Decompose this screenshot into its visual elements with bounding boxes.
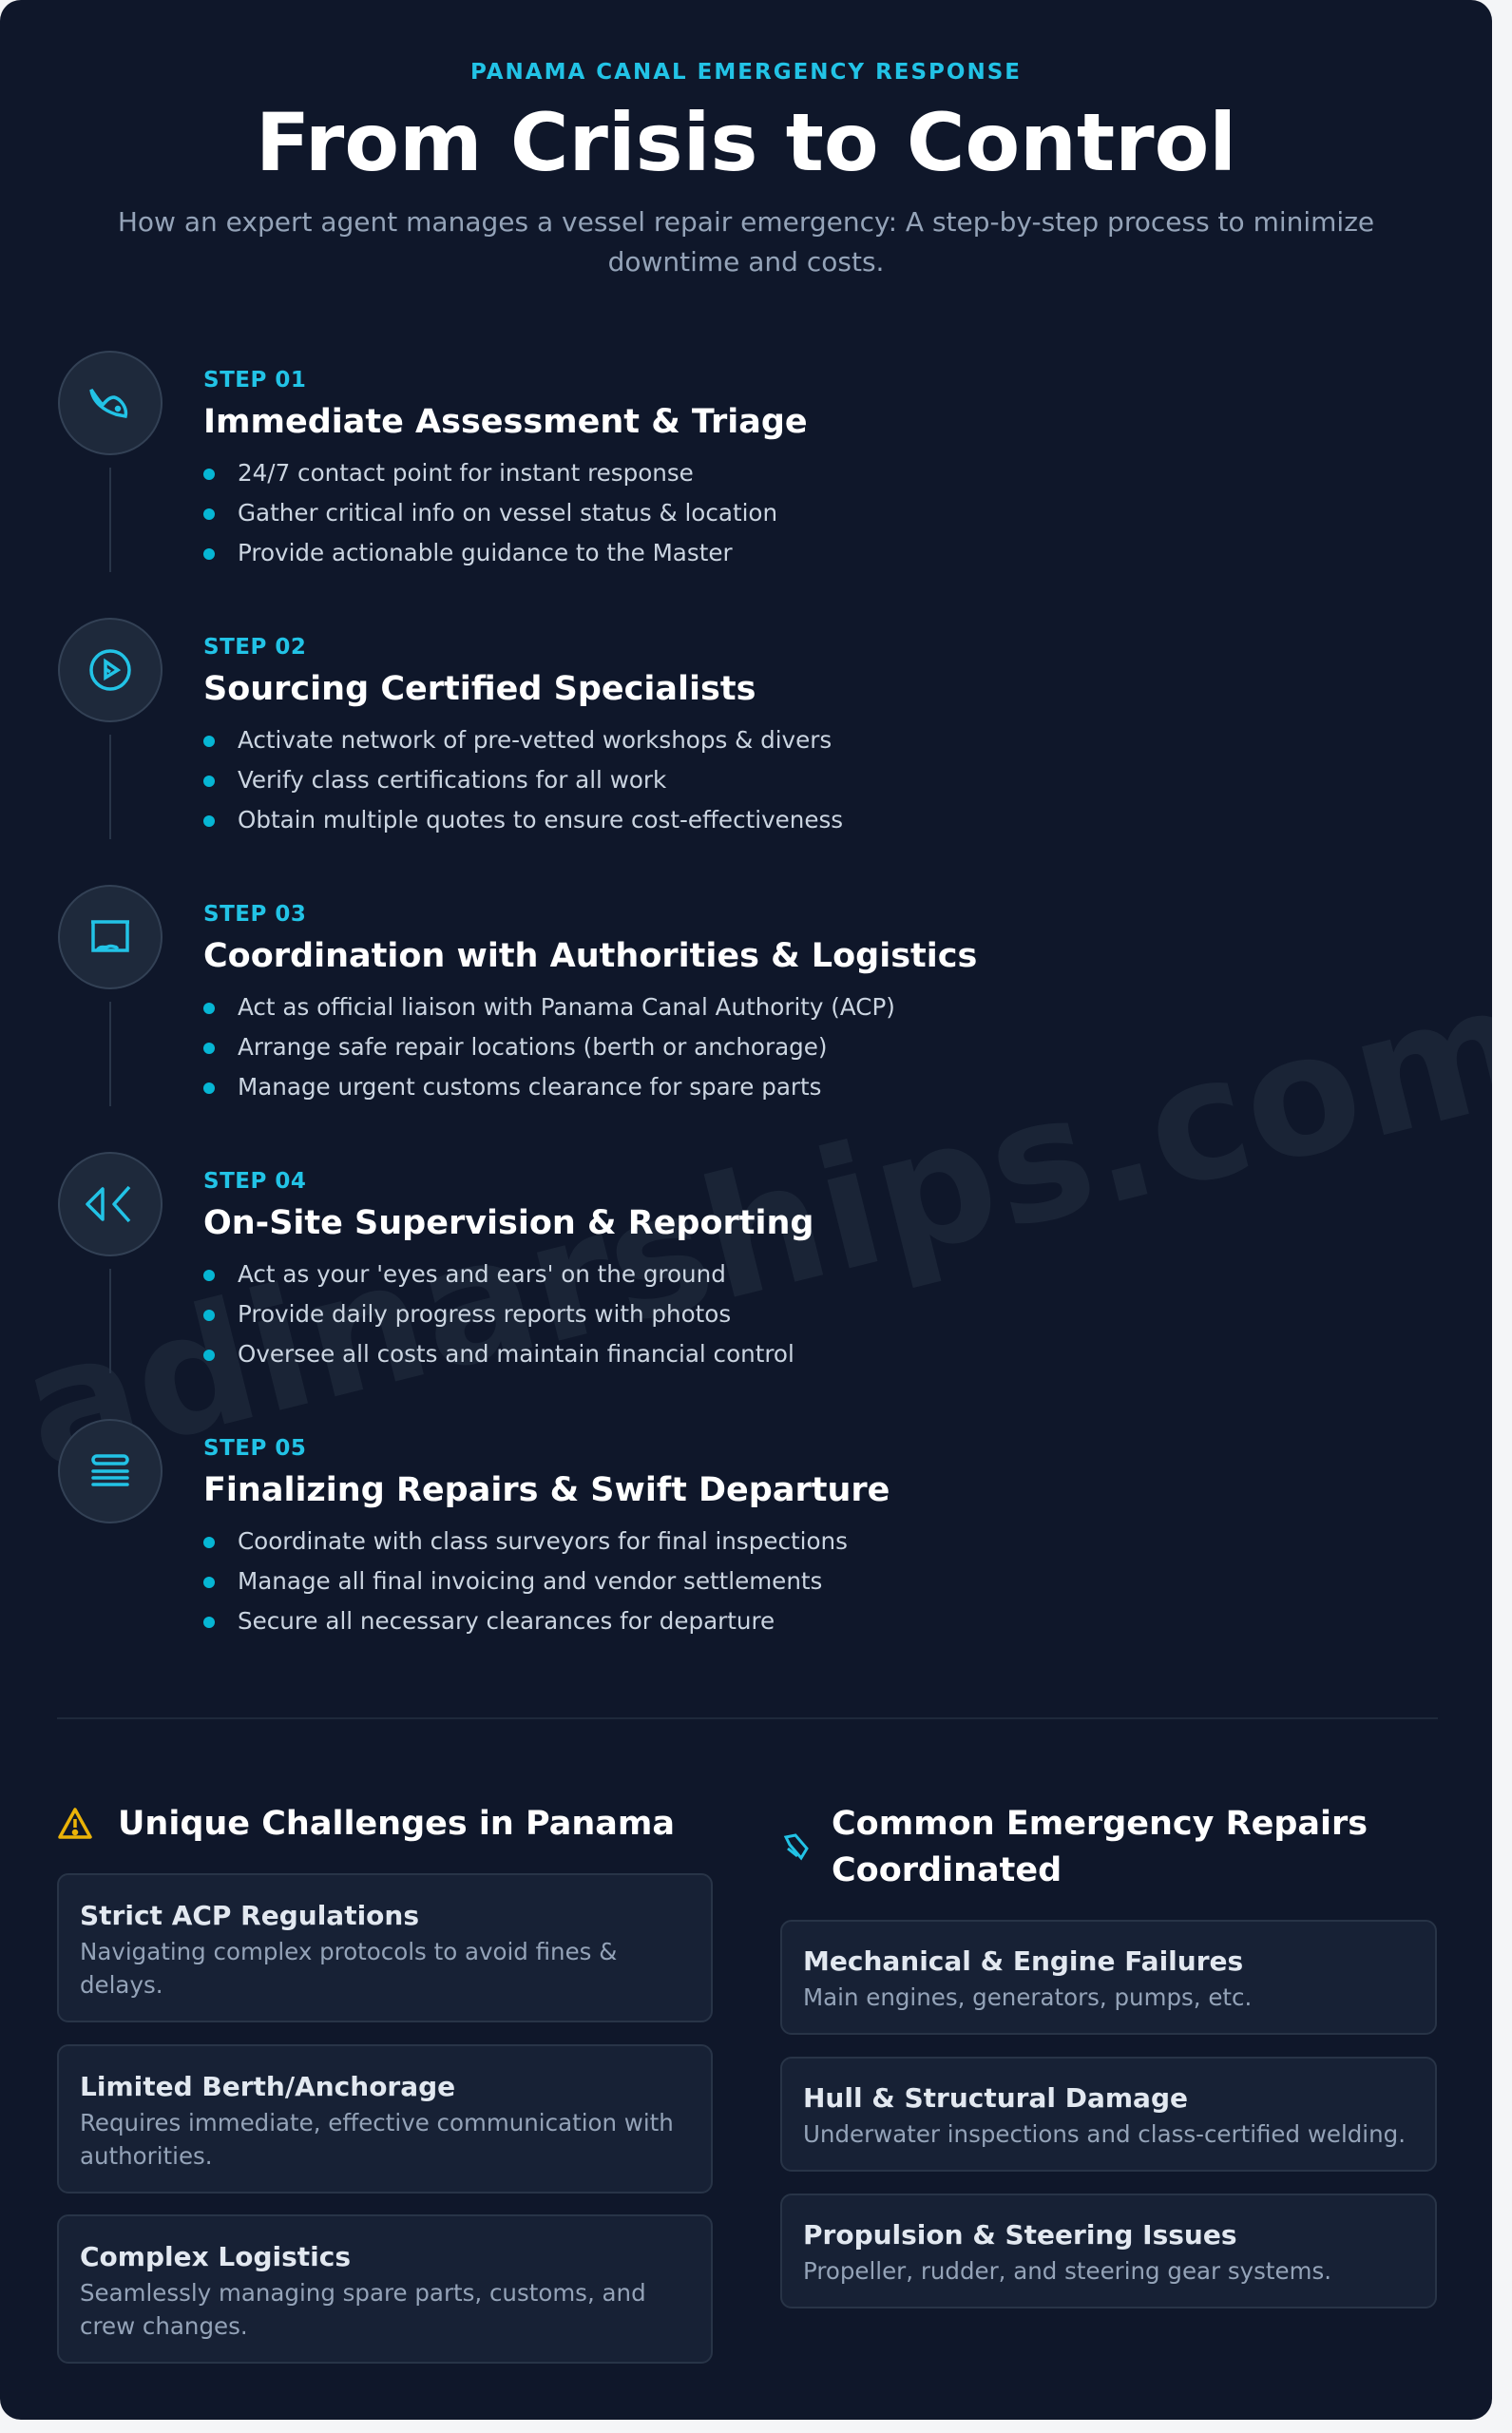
box: hull <box>780 2057 1437 2172</box>
step 3: Manage urgent customs clearance for spare parts <box>238 1073 821 1101</box>
step 3 <box>203 902 977 1101</box>
subtitle: How an expert agent manages a vessel repair emergency: A step-by-step process to minimize downtime and costs. <box>118 206 1374 278</box>
step 4: Provide daily progress reports with photos <box>238 1300 731 1328</box>
step 1: Provide actionable guidance to the Master <box>238 539 733 566</box>
box: propulsion <box>780 2194 1437 2308</box>
icon: step 3 <box>58 885 163 989</box>
box: ACP regulations: Navigating complex protocols to avoid fines & delays. <box>80 1938 617 1999</box>
icon: step 1 <box>58 351 163 455</box>
step 3: Act as official liaison with Panama Canal Authority (ACP) <box>238 993 895 1021</box>
heading: repairs: Coordinated <box>832 1851 1062 1889</box>
box: mechanical: Mechanical & Engine Failures <box>803 1945 1243 1977</box>
step 3: Coordination with Authorities & Logistics <box>203 937 977 975</box>
step 2: Activate network of pre-vetted workshops & divers <box>238 726 832 754</box>
panel: common repairs <box>780 1805 1437 2308</box>
step 1 <box>203 368 808 566</box>
step 2: Obtain multiple quotes to ensure cost-effectiveness <box>238 806 843 833</box>
title: From Crisis to Control <box>256 96 1236 189</box>
icon: step 4 <box>58 1152 163 1256</box>
box: ACP regulations: Strict ACP Regulations <box>80 1900 419 1931</box>
box: logistics: Seamlessly managing spare parts, customs, and crew changes. <box>80 2279 646 2340</box>
step 5: Manage all final invoicing and vendor settlements <box>238 1567 822 1595</box>
box: berth: Requires immediate, effective communication with authorities. <box>80 2109 674 2170</box>
box: propulsion: Propulsion & Steering Issues <box>803 2219 1237 2251</box>
eyebrow label: PANAMA CANAL EMERGENCY RESPONSE <box>470 60 1022 85</box>
step 1: STEP 01 <box>203 368 306 393</box>
box: propulsion: Propeller, rudder, and steering gear systems. <box>803 2257 1331 2285</box>
step 1: Gather critical info on vessel status & location <box>238 499 777 527</box>
step 5: Finalizing Repairs & Swift Departure <box>203 1471 890 1509</box>
heading: repairs <box>783 1805 1368 1889</box>
step 4: STEP 04 <box>203 1169 306 1194</box>
box: mechanical: Main engines, generators, pumps, etc. <box>803 1983 1252 2011</box>
step 2 <box>203 635 843 833</box>
step 5: Secure all necessary clearances for departure <box>238 1607 775 1635</box>
step 5: STEP 05 <box>203 1436 306 1461</box>
box: ACP regulations <box>57 1873 713 2022</box>
box: logistics: Complex Logistics <box>80 2241 351 2272</box>
step 2: Sourcing Certified Specialists <box>203 670 756 708</box>
step 2: STEP 02 <box>203 635 306 660</box>
box: berth: Limited Berth/Anchorage <box>80 2071 455 2102</box>
box: logistics <box>57 2214 713 2364</box>
step 4: Oversee all costs and maintain financial control <box>238 1340 794 1368</box>
box: berth <box>57 2044 713 2194</box>
step 4: Act as your 'eyes and ears' on the ground <box>238 1260 726 1288</box>
box: hull: Underwater inspections and class-certified welding. <box>803 2120 1406 2148</box>
step 3: Arrange safe repair locations (berth or anchorage) <box>238 1033 827 1061</box>
step 5 <box>203 1436 890 1635</box>
panel: unique challenges <box>57 1805 713 2364</box>
icon: step 5 <box>58 1419 163 1523</box>
heading: challenges: Unique Challenges in Panama <box>118 1805 675 1843</box>
step 2: Verify class certifications for all work <box>238 766 666 794</box>
icon: step 2 <box>58 618 163 722</box>
box: hull: Hull & Structural Damage <box>803 2082 1188 2114</box>
heading: repairs: Common Emergency Repairs <box>832 1805 1368 1843</box>
step 4 <box>203 1169 813 1368</box>
step 4: On-Site Supervision & Reporting <box>203 1204 813 1242</box>
step 1: Immediate Assessment & Triage <box>203 403 808 441</box>
step 5: Coordinate with class surveyors for final inspections <box>238 1527 848 1555</box>
box: mechanical <box>780 1920 1437 2035</box>
step 3: STEP 03 <box>203 902 306 927</box>
step 1: 24/7 contact point for instant response <box>238 459 694 487</box>
